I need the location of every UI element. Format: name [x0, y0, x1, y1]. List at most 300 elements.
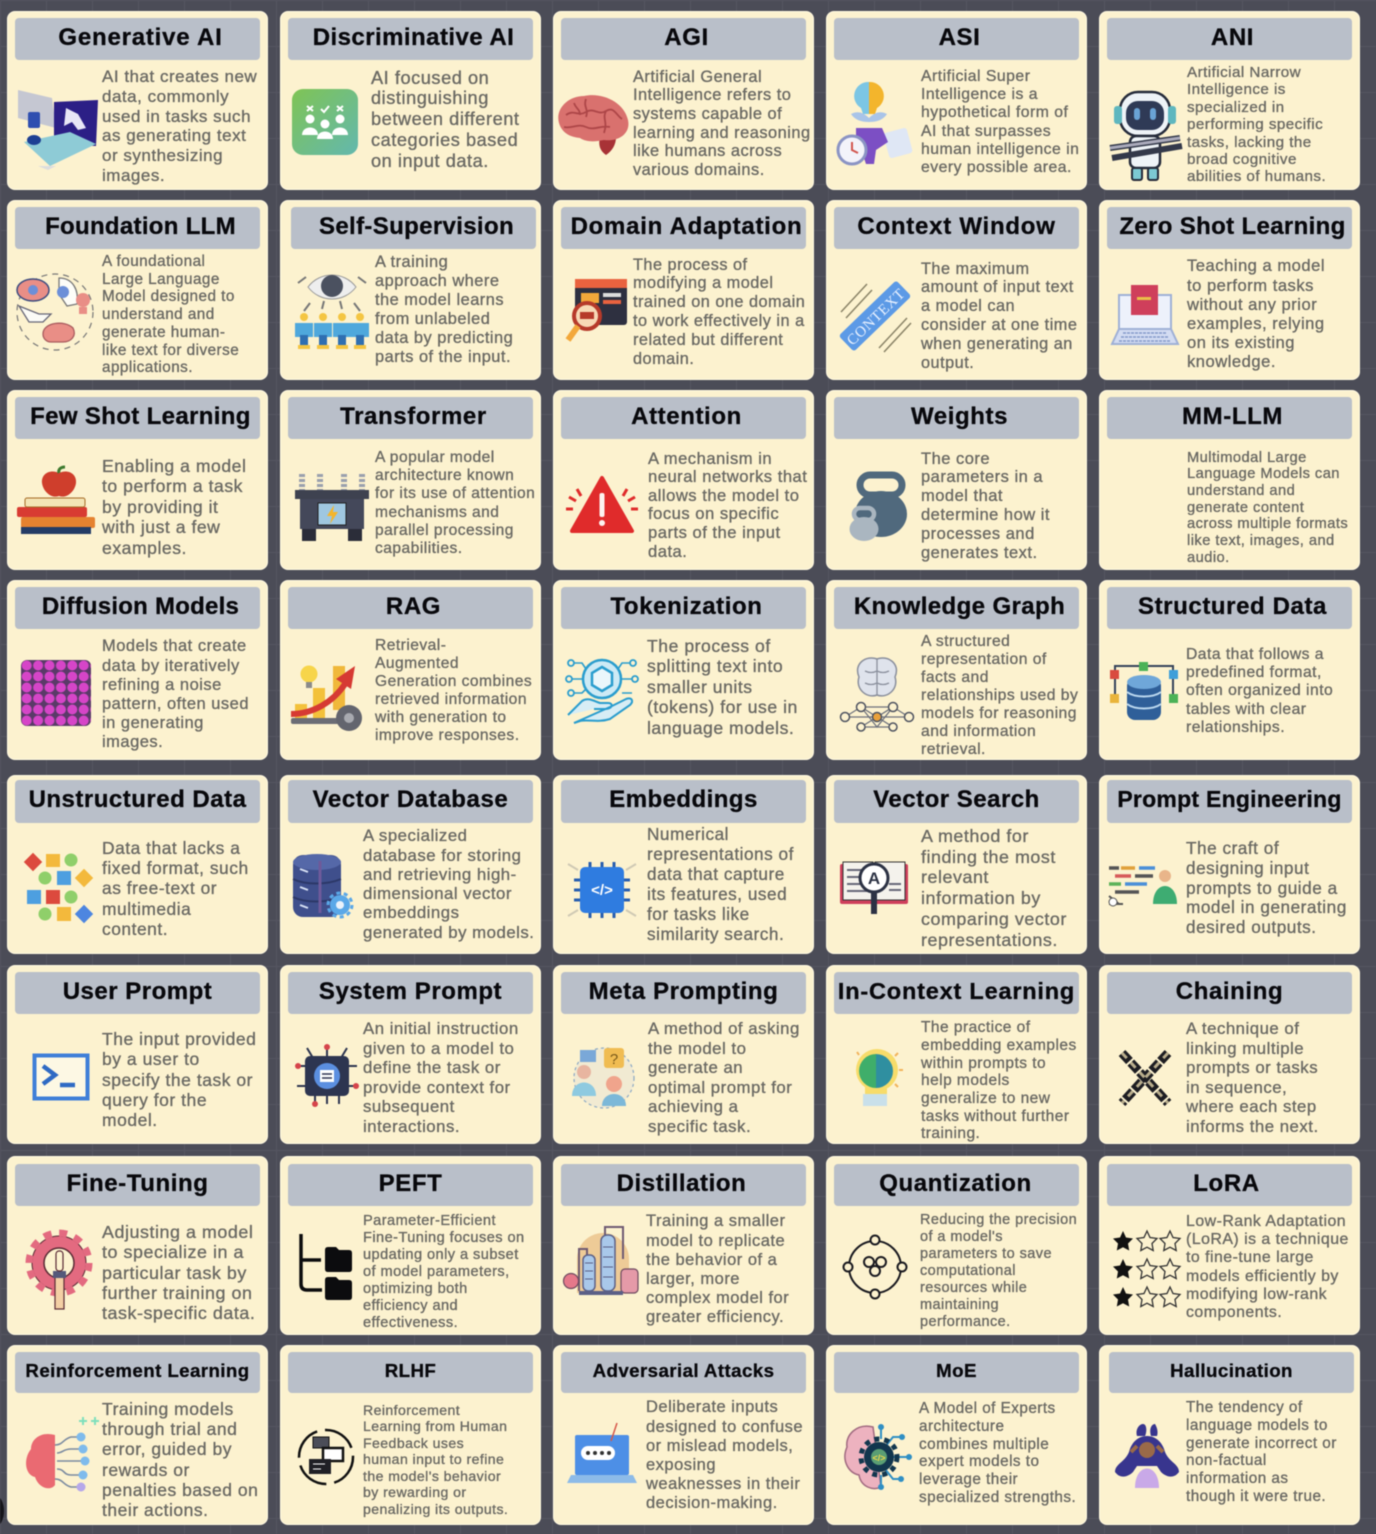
panel: Quantization: [826, 1156, 1087, 1335]
heading: [1107, 972, 1352, 1014]
icon: electrical transformer: [294, 474, 370, 542]
panel: Tokenization: [553, 580, 814, 760]
heading: [561, 1164, 806, 1206]
description: or mislead models,: [646, 1437, 793, 1455]
heading: Adversarial Attacks: [593, 1360, 774, 1381]
description: understand and: [1187, 483, 1295, 499]
description: [632, 68, 811, 179]
heading: In-Context Learning: [838, 978, 1075, 1004]
description: broad cognitive: [1187, 151, 1297, 168]
panel: Adversarial Attacks: [553, 1345, 814, 1525]
description: tasks, lacking the: [1187, 134, 1312, 151]
description: [632, 256, 805, 368]
description: language models.: [647, 718, 794, 738]
icon: grid of magenta dots: [20, 659, 92, 727]
heading: [15, 18, 260, 60]
panel: Few Shot Learning: [7, 390, 268, 570]
description: Fine-Tuning focuses on: [363, 1230, 525, 1246]
description: define the task or: [363, 1058, 501, 1077]
description: images.: [102, 166, 165, 185]
description: data, commonly: [102, 87, 229, 106]
heading: [561, 587, 806, 629]
heading: [1107, 587, 1352, 629]
description: components.: [1186, 1304, 1282, 1321]
description: Training models: [102, 1399, 234, 1419]
icon: bulb, clock and calendar: [836, 81, 912, 166]
icon: robot with wrench: [1108, 90, 1184, 182]
icon: context tag: CONTEXT: [844, 286, 909, 349]
description: through trial and: [102, 1419, 237, 1439]
panel: Unstructured Data: [7, 775, 268, 954]
description: to fine-tune large: [1186, 1249, 1314, 1266]
description: across multiple formats: [1187, 516, 1348, 532]
description: greater efficiency.: [646, 1308, 784, 1326]
panel: Vector Search: [826, 775, 1087, 954]
description: their actions.: [102, 1500, 209, 1520]
description: [102, 1399, 258, 1520]
description: Large Language: [102, 271, 220, 288]
heading: Chaining: [1176, 978, 1283, 1005]
description: data by predicting: [375, 328, 513, 346]
description: [370, 68, 520, 172]
description: embeddings: [363, 903, 459, 922]
heading: Weights: [911, 403, 1008, 430]
panel: Distillation: [553, 1156, 814, 1335]
description: abilities of humans.: [1187, 168, 1326, 185]
description: A structured: [921, 633, 1010, 650]
icon: pink gear with tool: [27, 1231, 93, 1311]
description: the model's behavior: [363, 1468, 501, 1484]
description: Low-Rank Adaptation: [1186, 1213, 1346, 1230]
description: [920, 450, 1050, 562]
icon: blue code chip: </>: [591, 882, 613, 899]
description: help models: [921, 1072, 1010, 1089]
description: Reducing the precision: [920, 1212, 1077, 1228]
heading: [288, 587, 533, 629]
description: linking multiple: [1186, 1039, 1304, 1058]
description: capabilities.: [375, 540, 463, 557]
description: modifying low-rank: [1186, 1286, 1327, 1303]
description: representations of: [647, 844, 794, 864]
panel: Chaining: [1099, 965, 1360, 1144]
panel: Discriminative AI: [280, 11, 541, 190]
description: [648, 1019, 800, 1136]
panel: In-Context Learning: [826, 965, 1087, 1144]
panel: User Prompt: [7, 965, 268, 1144]
description: [374, 449, 535, 558]
description: penalizing its outputs.: [363, 1501, 508, 1517]
icon: browser window with magnifier: [565, 278, 628, 342]
description: improve responses.: [375, 727, 520, 744]
description: generate an: [648, 1058, 743, 1077]
panel: Self-Supervision: [280, 200, 541, 380]
panel: Attention: [553, 390, 814, 570]
description: modifying a model: [633, 274, 773, 292]
description: maintaining: [920, 1297, 999, 1313]
description: like text, images, and: [1187, 533, 1335, 549]
description: expert models to: [919, 1453, 1039, 1470]
description: related but different: [633, 331, 783, 349]
description: [920, 68, 1079, 176]
description: optimal prompt for: [648, 1078, 792, 1097]
description: exposing: [646, 1456, 716, 1474]
heading: User Prompt: [63, 978, 212, 1005]
heading: Foundation LLM: [45, 213, 236, 240]
description: to perform a task: [102, 476, 243, 496]
description: from unlabeled: [375, 310, 490, 328]
heading: Unstructured Data: [29, 786, 246, 813]
icon: red brain: [558, 94, 630, 156]
panel: Fine-Tuning: [7, 1156, 268, 1335]
description: [102, 1029, 256, 1130]
description: Model designed to: [102, 288, 235, 305]
description: decision-making.: [646, 1494, 778, 1512]
heading: [834, 18, 1079, 60]
description: domain.: [633, 350, 694, 368]
icon: red warning triangle: [565, 475, 639, 534]
description: Augmented: [375, 655, 459, 672]
description: computational: [920, 1263, 1016, 1279]
description: [646, 1398, 803, 1514]
panel: Transformer: [280, 390, 541, 570]
description: [646, 636, 798, 738]
heading: Generative AI: [58, 24, 223, 51]
description: the model to: [648, 1039, 746, 1058]
heading: MoE: [936, 1360, 977, 1381]
description: achieving a: [648, 1097, 738, 1116]
description: [1186, 1019, 1319, 1136]
description: prompts or tasks: [1186, 1058, 1318, 1077]
panel: AGI: [553, 11, 814, 190]
description: task-specific data.: [102, 1303, 255, 1323]
description: amount of input text: [921, 278, 1074, 296]
heading: System Prompt: [319, 978, 502, 1005]
description: systems capable of: [633, 105, 782, 123]
description: neural networks that: [648, 467, 807, 486]
heading: Diffusion Models: [42, 593, 239, 620]
description: A mechanism in: [648, 449, 772, 468]
description: by a user to: [102, 1049, 200, 1069]
heading: [291, 207, 536, 249]
description: Artificial Narrow: [1187, 64, 1301, 81]
icon: feedback cycle: [295, 1425, 357, 1489]
description: distinguishing: [371, 88, 489, 108]
description: audio.: [1187, 550, 1230, 566]
description: knowledge.: [1187, 352, 1276, 371]
panel: PEFT: [280, 1156, 541, 1335]
icon: light bulb: [849, 1050, 901, 1110]
heading: Knowledge Graph: [854, 593, 1065, 620]
description: within prompts to: [921, 1055, 1046, 1072]
description: interactions.: [363, 1117, 460, 1136]
description: generates text.: [921, 544, 1038, 562]
description: learning and reasoning: [633, 124, 811, 142]
heading: [834, 587, 1079, 629]
description: complex model for: [646, 1289, 789, 1307]
description: designed to confuse: [646, 1418, 803, 1436]
panel: Diffusion Models: [7, 580, 268, 760]
description: to perform tasks: [1187, 276, 1314, 295]
description: resources while: [920, 1280, 1027, 1296]
description: in generating: [102, 714, 204, 732]
panel: Structured Data: [1099, 580, 1360, 760]
description: retrieval.: [921, 741, 986, 758]
panel: Domain Adaptation: [553, 200, 814, 380]
description: A training: [375, 252, 448, 270]
description: fixed format, such: [102, 858, 249, 878]
description: generalize to new: [921, 1090, 1050, 1107]
heading: Embeddings: [609, 786, 758, 813]
heading: [834, 1352, 1079, 1393]
description: parallel processing: [375, 522, 514, 539]
icon: hexagon held by hand: [564, 658, 640, 724]
description: language models to: [1186, 1417, 1328, 1434]
heading: [1107, 397, 1352, 439]
description: The tendency of: [1186, 1399, 1303, 1416]
panel: ANI: [1099, 11, 1360, 190]
description: Models that create: [102, 637, 247, 655]
icon: books and apple: [16, 464, 96, 535]
heading: [15, 397, 260, 439]
panel: RLHF: [280, 1345, 541, 1525]
description: embedding examples: [921, 1037, 1077, 1054]
heading: PEFT: [379, 1170, 442, 1197]
description: [920, 260, 1077, 372]
description: focus on specific: [648, 504, 779, 523]
icon: system chip: [295, 1044, 359, 1108]
heading: MM-LLM: [1182, 403, 1283, 430]
icon: pink brain with wires: [23, 1415, 107, 1503]
icon: star ratings: [1113, 1229, 1183, 1309]
description: A popular model: [375, 449, 495, 466]
description: Data that follows a: [1186, 646, 1324, 663]
description: [1186, 839, 1347, 938]
heading: Discriminative AI: [313, 24, 514, 51]
description: [920, 1212, 1077, 1331]
description: A method for: [921, 826, 1029, 846]
panel: Context Window: [826, 200, 1087, 380]
description: and information: [921, 723, 1036, 740]
description: Teaching a model: [1187, 256, 1325, 275]
description: predefined format,: [1186, 664, 1322, 681]
icon: terminal prompt: [32, 1053, 90, 1101]
description: relationships used by: [921, 687, 1078, 704]
panel: RAG: [280, 580, 541, 760]
description: approach where: [375, 272, 499, 290]
description: relationships.: [1186, 719, 1285, 736]
description: as generating text: [102, 126, 246, 145]
description: Multimodal Large: [1187, 450, 1307, 466]
description: architecture: [919, 1418, 1004, 1435]
description: database for storing: [363, 846, 521, 865]
description: query for the: [102, 1090, 207, 1110]
panel: MoE: [826, 1345, 1087, 1525]
description: models efficiently by: [1186, 1268, 1339, 1284]
description: images.: [102, 733, 163, 751]
description: Generation combines: [375, 673, 532, 690]
description: The process of: [633, 256, 748, 274]
description: [1186, 1213, 1349, 1322]
description: data that capture: [647, 864, 785, 884]
heading: [288, 1164, 533, 1206]
description: [363, 1212, 525, 1332]
description: tables with clear: [1186, 700, 1306, 718]
description: combines multiple: [919, 1436, 1049, 1453]
icon: ring with nodes: [842, 1234, 908, 1300]
description: of a model's: [920, 1229, 1003, 1245]
icon: kettlebells: [849, 470, 908, 542]
description: [374, 637, 532, 744]
description: Feedback uses: [363, 1435, 464, 1451]
heading: Fine-Tuning: [66, 1170, 209, 1197]
description: trained on one domain: [633, 293, 805, 311]
description: content.: [102, 919, 168, 939]
description: splitting text into: [647, 656, 783, 676]
description: understand and: [102, 306, 215, 323]
description: mechanisms and: [375, 504, 499, 521]
description: with generation to: [375, 709, 507, 726]
description: or synthesizing: [102, 146, 223, 165]
heading: Self-Supervision: [319, 213, 514, 240]
description: efficiency and: [363, 1298, 458, 1314]
heading: [561, 780, 806, 823]
heading: [15, 780, 260, 823]
description: retrieved information: [375, 691, 527, 708]
description: of model parameters,: [363, 1264, 510, 1280]
heading: [834, 972, 1079, 1014]
description: error, guided by: [102, 1439, 232, 1459]
description: [646, 1212, 789, 1328]
description: Numerical: [647, 824, 729, 844]
description: [374, 252, 513, 366]
description: [363, 826, 534, 942]
description: The practice of: [921, 1019, 1030, 1036]
icon: laptop with red book: [1110, 284, 1180, 346]
heading: Distillation: [617, 1170, 746, 1197]
description: [919, 1400, 1076, 1507]
description: though it were true.: [1186, 1488, 1326, 1505]
description: performance.: [920, 1314, 1011, 1330]
description: [1186, 256, 1325, 372]
description: [1186, 1399, 1337, 1506]
description: leverage their: [919, 1471, 1018, 1488]
heading: Hallucination: [1170, 1360, 1293, 1381]
panel: Weights: [826, 390, 1087, 570]
heading: Reinforcement Learning: [25, 1360, 250, 1381]
description: information by: [921, 888, 1041, 908]
heading: [15, 207, 260, 249]
description: generated by models.: [363, 923, 534, 942]
icon: database with linked blocks: [1109, 661, 1179, 721]
heading: Attention: [631, 403, 742, 430]
heading: Domain Adaptation: [571, 213, 802, 240]
description: generate incorrect or: [1186, 1435, 1337, 1452]
description: generate content: [1187, 500, 1304, 516]
heading: [15, 587, 260, 629]
icon: laptop with password bubble: [567, 1429, 637, 1489]
description: to work effectively in a: [633, 312, 805, 330]
icon: black folder tree: [298, 1232, 354, 1302]
heading: Vector Database: [313, 786, 508, 813]
description: designing input: [1186, 858, 1309, 878]
description: rewards or: [102, 1460, 190, 1480]
description: a model can: [921, 297, 1015, 315]
description: non-factual: [1186, 1452, 1267, 1469]
description: by providing it: [102, 497, 218, 517]
description: without any prior: [1187, 295, 1317, 314]
description: parameters to save: [920, 1246, 1052, 1262]
description: (tokens) for use in: [647, 697, 798, 717]
heading: Few Shot Learning: [30, 403, 251, 430]
panel: LoRA: [1099, 1156, 1360, 1335]
description: desired outputs.: [1186, 917, 1317, 937]
icon: distillation plant: [563, 1219, 641, 1303]
description: like text for diverse: [102, 342, 239, 359]
description: comparing vector: [921, 909, 1067, 929]
description: Intelligence is: [1187, 81, 1286, 98]
description: data by iteratively: [102, 657, 240, 675]
icon: people classification: [291, 88, 359, 156]
description: specific task.: [648, 1117, 751, 1136]
description: specify the task or: [102, 1070, 253, 1090]
description: specialized strengths.: [919, 1489, 1076, 1506]
description: representation of: [921, 651, 1047, 668]
description: and retrieving high-: [363, 865, 517, 884]
description: model that: [921, 487, 1003, 505]
panel: MM-LLM: [1099, 390, 1360, 570]
description: [921, 1019, 1077, 1143]
heading: [561, 1352, 806, 1393]
description: given to a model to: [363, 1039, 514, 1058]
heading: [834, 207, 1079, 249]
description: with just a few: [102, 517, 220, 537]
heading: [288, 18, 533, 60]
description: like humans across: [633, 142, 782, 160]
heading: Zero Shot Learning: [1119, 213, 1346, 240]
description: [363, 1019, 519, 1136]
icon: question bubble and people: ?: [610, 1051, 618, 1068]
heading: [1107, 18, 1352, 60]
description: Enabling a model: [102, 456, 246, 476]
heading: [15, 972, 260, 1014]
icon: brain with code gear: [843, 1423, 913, 1495]
description: human input to refine: [363, 1451, 504, 1467]
description: specialized in: [1187, 99, 1285, 116]
panel: Generative AI: [7, 11, 268, 190]
description: The core: [921, 450, 990, 468]
description: by rewarding or: [363, 1484, 466, 1500]
description: Artificial General: [633, 68, 762, 86]
description: [101, 456, 246, 558]
icon: colored shapes: [23, 852, 94, 924]
description: Language Models can: [1187, 466, 1340, 482]
heading: [1109, 1352, 1354, 1393]
description: The maximum: [921, 260, 1030, 278]
description: [921, 826, 1067, 951]
heading: [1107, 780, 1352, 823]
description: to specialize in a: [102, 1242, 244, 1262]
description: training.: [921, 1125, 980, 1142]
icon: code lines and person: [1107, 858, 1183, 910]
icon: database cylinder and gear: [292, 853, 354, 919]
description: its features, used: [647, 884, 787, 904]
description: [102, 838, 249, 939]
heading: Context Window: [857, 213, 1056, 240]
description: The craft of: [1186, 838, 1279, 858]
description: AI that surpasses: [921, 123, 1051, 140]
heading: [288, 780, 533, 823]
heading: Tokenization: [610, 593, 763, 620]
